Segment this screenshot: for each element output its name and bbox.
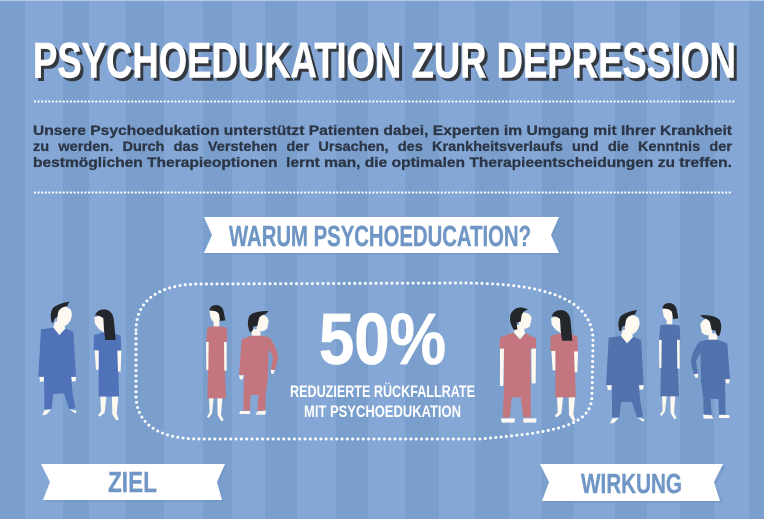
- intro text: Unsere Psychoedukation unterstützt Patienten dabei, Experten im Umgang mit Ihrer Krankheit: [33, 122, 732, 138]
- banner: wirkung: WIRKUNG: [581, 468, 682, 499]
- intro text: [33, 122, 733, 170]
- statistic caption: REDUZIERTE RÜCKFALLRATE: [290, 382, 475, 401]
- figure: blue man far right: [691, 315, 730, 419]
- figure: blue man right: [606, 310, 644, 424]
- figure: pink man right: [499, 307, 537, 423]
- dotted outline around result: [136, 283, 593, 439]
- figure: blue woman left: [94, 309, 121, 420]
- figure: pink woman: [206, 305, 227, 421]
- statistic caption: MIT PSYCHOEDUKATION: [304, 403, 461, 421]
- figure: pink woman right: [550, 310, 578, 421]
- statistic: 50 percent: 50%: [319, 300, 446, 380]
- intro text: zu werden. Durch das Verstehen der Ursachen, des Krankheitsverlaufs und die Kenntnis der: [33, 138, 733, 154]
- banner: ziel: [41, 464, 227, 502]
- banner: warum psychoeducation: WARUM PSYCHOEDUCATION?: [229, 221, 531, 253]
- banner: wirkung: [540, 464, 726, 503]
- figure: pink man: [239, 311, 278, 415]
- banner: warum psychoeducation: [204, 217, 561, 255]
- intro text: bestmöglichen Therapieoptionen lernt man, die optimalen Therapieentscheidungen zu treffen.: [33, 154, 732, 170]
- banner: ziel: ZIEL: [108, 467, 157, 499]
- figure: blue man left: [38, 302, 76, 415]
- statistic caption: [290, 382, 475, 421]
- figure: blue woman right: [659, 303, 680, 419]
